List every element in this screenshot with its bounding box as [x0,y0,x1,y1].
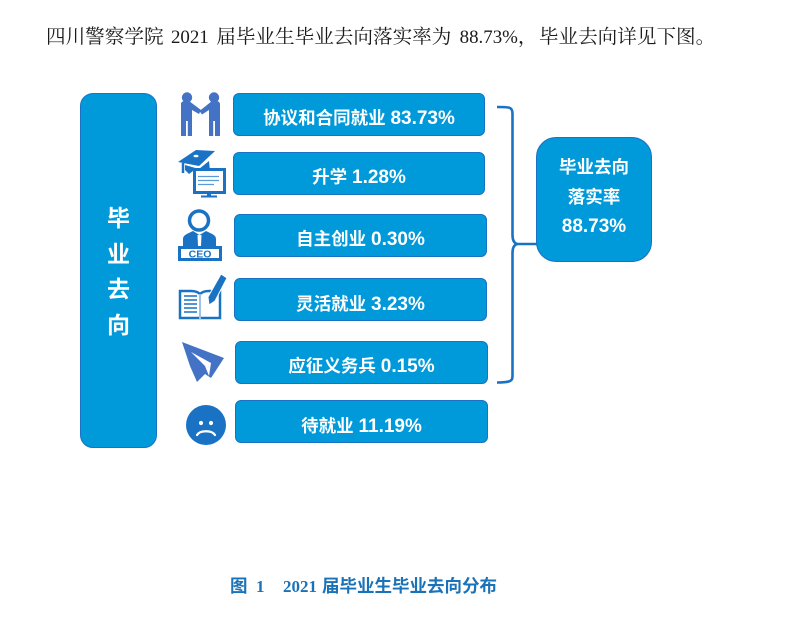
bar: self-employment [234,214,487,257]
bar: self-employment: 自主创业 0.30% [296,229,425,250]
bar: flexible employment [234,278,487,321]
bar: further study: 升学 1.28% [312,167,406,188]
bar: flexible employment: 灵活就业 3.23% [296,294,425,315]
bar: military service: 应征义务兵 0.15% [288,356,435,377]
panel: total rate: 毕业去向 [559,157,629,177]
icon: handshake [181,92,220,136]
panel: left label 毕业去向: 业 [107,240,130,266]
panel: left label 毕业去向: 去 [107,276,130,302]
bar: military service [235,341,488,384]
intro sentence: 四川警察学院 2021 届毕业生毕业去向落实率为 88.73%，毕业去向详见下图。 [46,27,715,48]
panel: left label 毕业去向: 向 [107,312,130,338]
icon: CEO person [178,209,222,261]
bracket connector [497,106,536,384]
icon: sad face [186,405,226,445]
bar: awaiting employment [235,400,488,443]
figure caption: 图 1 2021 届毕业生毕业去向分布 [230,576,497,596]
panel: total rate [536,137,652,262]
icon: book and pencil [178,274,226,320]
bar: further study [233,152,485,195]
bar: agreement employment: 协议和合同就业 83.73% [263,108,455,129]
panel: left label 毕业去向: 毕 [107,205,130,231]
icon: CEO person: CEO [189,248,211,260]
panel: left label 毕业去向 [80,93,157,448]
icon: graduation cap and monitor [178,150,226,198]
bar: agreement employment [233,93,485,136]
panel: total rate: 88.73% [562,216,626,237]
bar: awaiting employment: 待就业 11.19% [301,416,422,437]
panel: total rate: 落实率 [568,186,620,206]
icon: paper plane [182,342,224,382]
